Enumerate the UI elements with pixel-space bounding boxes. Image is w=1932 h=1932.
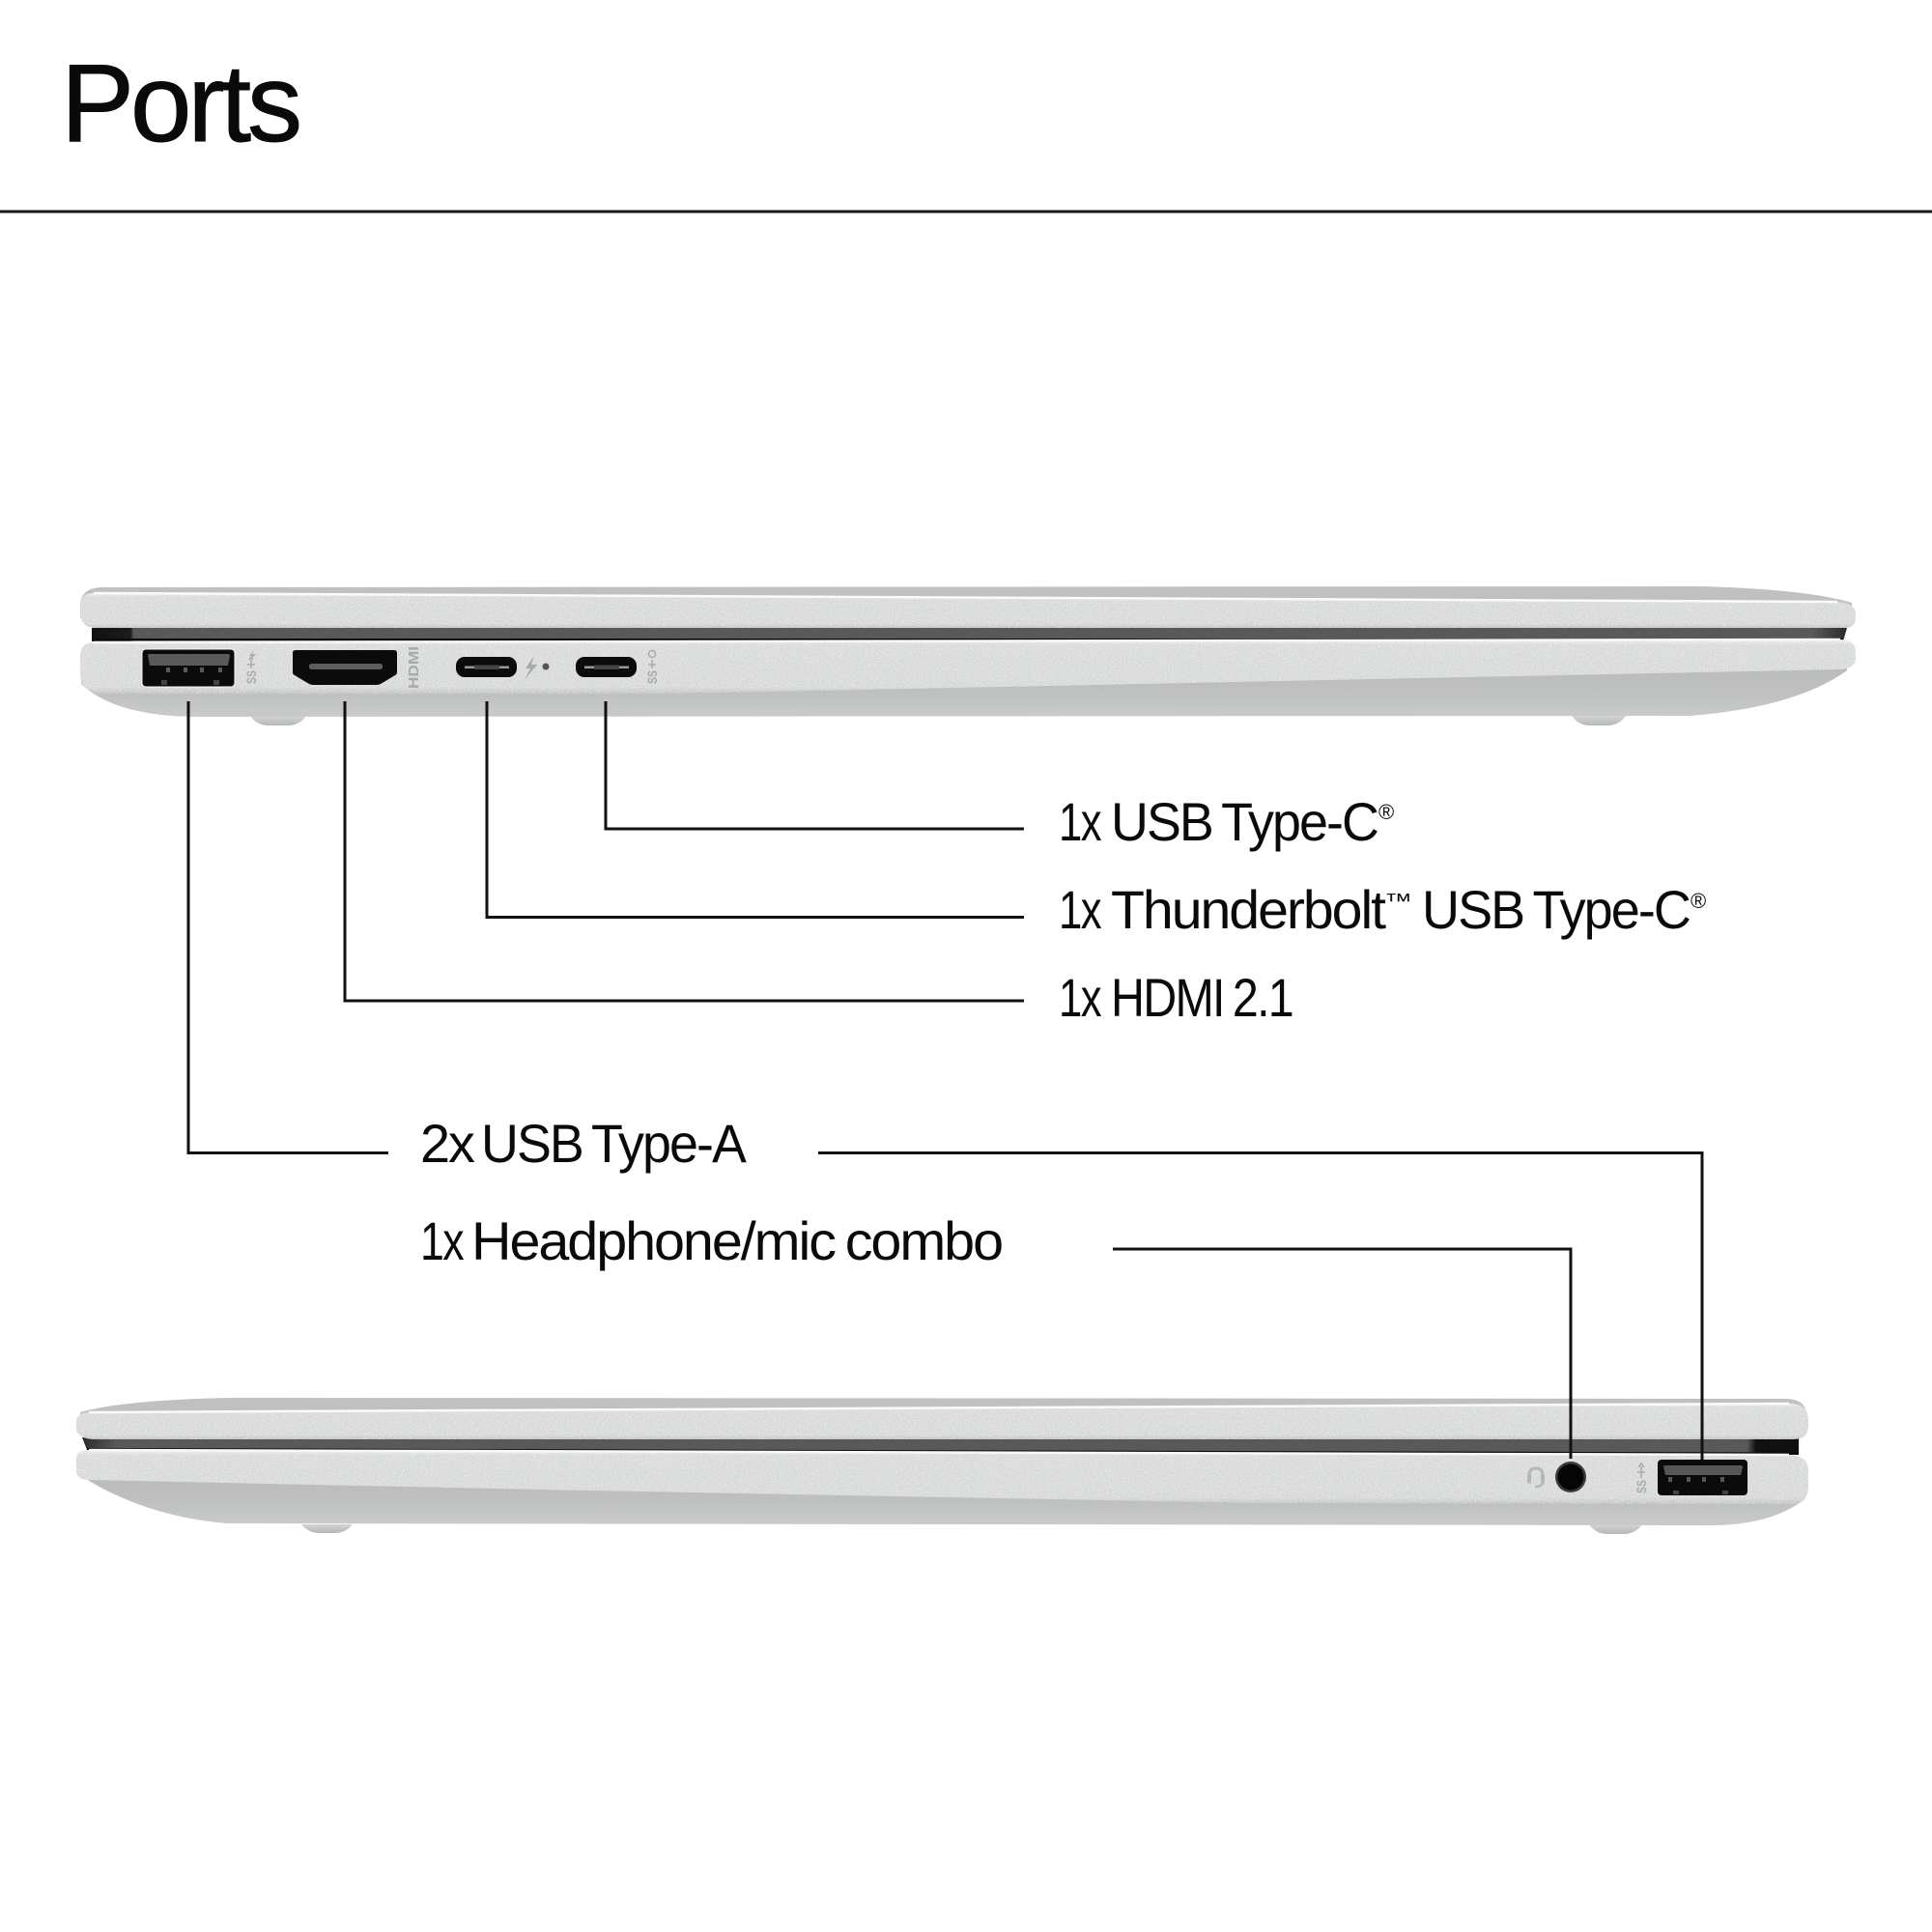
- port: headphone jack: [1555, 1462, 1586, 1492]
- label: Thunderbolt USB Type-C: ™: [1384, 889, 1412, 913]
- mark: SS lightning: [243, 649, 259, 684]
- label: USB Type-C: USB Type-C: [1111, 791, 1378, 852]
- port: Thunderbolt USB-C: [456, 657, 517, 677]
- title: Ports: [61, 43, 302, 165]
- label: USB Type-C: ®: [1378, 800, 1394, 824]
- label: Thunderbolt USB Type-C: 1x: [1059, 879, 1102, 940]
- connector: HDMI: [345, 701, 1024, 1001]
- label: USB Type-A: 2x: [420, 1113, 475, 1174]
- laptop: right side view: [76, 1398, 1808, 1534]
- mark: SS lightning: SS: [243, 670, 259, 684]
- mark: SS 10: SS: [644, 670, 660, 684]
- mark: HDMI: HDMI: [406, 646, 422, 689]
- laptop: left side view: [80, 586, 1856, 725]
- mark: SS 10: [644, 651, 660, 684]
- connector: Thunderbolt: [487, 701, 1024, 918]
- port: USB Type-A right: [1658, 1460, 1747, 1495]
- port: USB-C: [576, 657, 637, 677]
- connector: headphone jack: [1113, 1249, 1571, 1459]
- icon: headset: [1528, 1468, 1544, 1487]
- mark: SS USB: [1634, 1463, 1649, 1493]
- connector: USB Type-A left: [188, 701, 388, 1153]
- connector: USB Type-C: [606, 701, 1024, 829]
- label: headphone/mic combo: Headphone/mic combo: [471, 1210, 1002, 1271]
- label: USB Type-A: USB Type-A: [481, 1113, 748, 1174]
- label: Thunderbolt USB Type-C: ®: [1690, 889, 1706, 913]
- label: HDMI 2.1: 1x: [1059, 967, 1102, 1028]
- label: headphone/mic combo: 1x: [420, 1210, 465, 1271]
- icon: Thunderbolt bolt and indicator: [525, 656, 549, 680]
- header divider: [0, 211, 1932, 213]
- label: USB Type-C: 1x: [1059, 791, 1102, 852]
- label: HDMI 2.1: [1059, 967, 1293, 1028]
- port: HDMI: [293, 650, 397, 685]
- connector: USB Type-A right: [818, 1153, 1702, 1460]
- label: Thunderbolt USB Type-C: Thunderbolt: [1111, 879, 1386, 940]
- label: Thunderbolt USB Type-C: [1059, 879, 1706, 940]
- mark: SS USB: SS: [1634, 1480, 1649, 1493]
- label: HDMI 2.1: HDMI 2.1: [1111, 967, 1293, 1028]
- port: USB Type-A left: [142, 649, 235, 687]
- label: Thunderbolt USB Type-C: USB Type-C: [1422, 879, 1690, 940]
